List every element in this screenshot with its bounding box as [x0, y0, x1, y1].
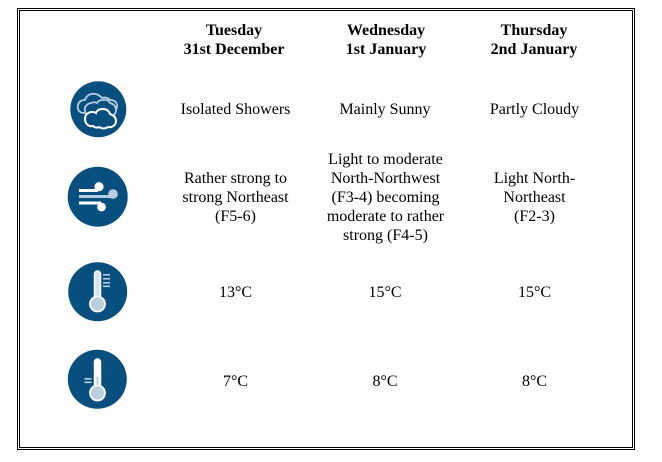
wind: Wednesday: (F3-4) becoming	[332, 189, 439, 206]
wind: Tuesday: Rather strong to	[184, 170, 287, 187]
icon: low temperature thermometer	[68, 350, 127, 409]
wind: Thursday	[494, 170, 575, 225]
wind: Wednesday	[327, 151, 444, 244]
heading: Wednesday: 1st January	[346, 41, 426, 58]
weather: Wednesday: Mainly Sunny	[339, 101, 431, 118]
min temperature: Wednesday: 8°C	[372, 373, 398, 390]
heading: Wednesday: Wednesday	[347, 22, 425, 39]
wind: Thursday: Northeast	[503, 189, 566, 206]
wind: Tuesday: (F5-6)	[215, 208, 256, 225]
weather: Tuesday: Isolated Showers	[181, 101, 290, 118]
heading: Wednesday	[346, 22, 426, 58]
heading: Thursday: 2nd January	[491, 41, 577, 58]
wind: Wednesday: strong (F4-5)	[343, 227, 428, 244]
weather: Thursday: Partly Cloudy	[490, 101, 579, 118]
max temperature: Tuesday: 13°C	[219, 284, 252, 301]
heading: Thursday	[491, 22, 578, 58]
wind: Wednesday: North-Northwest	[331, 170, 440, 187]
wind: Thursday: (F2-3)	[514, 208, 555, 225]
wind: Tuesday: strong Northeast	[182, 189, 289, 206]
wind: Wednesday: Light to moderate	[328, 151, 443, 168]
heading: Tuesday: 31st December	[184, 41, 284, 58]
icon: clouds	[70, 81, 126, 137]
max temperature: Thursday: 15°C	[518, 284, 551, 301]
heading: Thursday: Thursday	[501, 22, 567, 39]
max temperature: Wednesday: 15°C	[368, 284, 402, 301]
icon: wind	[68, 167, 128, 227]
wind: Wednesday: moderate to rather	[327, 208, 444, 225]
wind: Thursday: Light North-	[494, 170, 575, 187]
icon: high temperature thermometer	[68, 262, 127, 321]
wind: Tuesday	[182, 170, 289, 225]
heading: Tuesday	[184, 22, 284, 58]
heading: Tuesday: Tuesday	[206, 22, 262, 39]
min temperature: Thursday: 8°C	[522, 373, 547, 390]
min temperature: Tuesday: 7°C	[223, 373, 248, 390]
